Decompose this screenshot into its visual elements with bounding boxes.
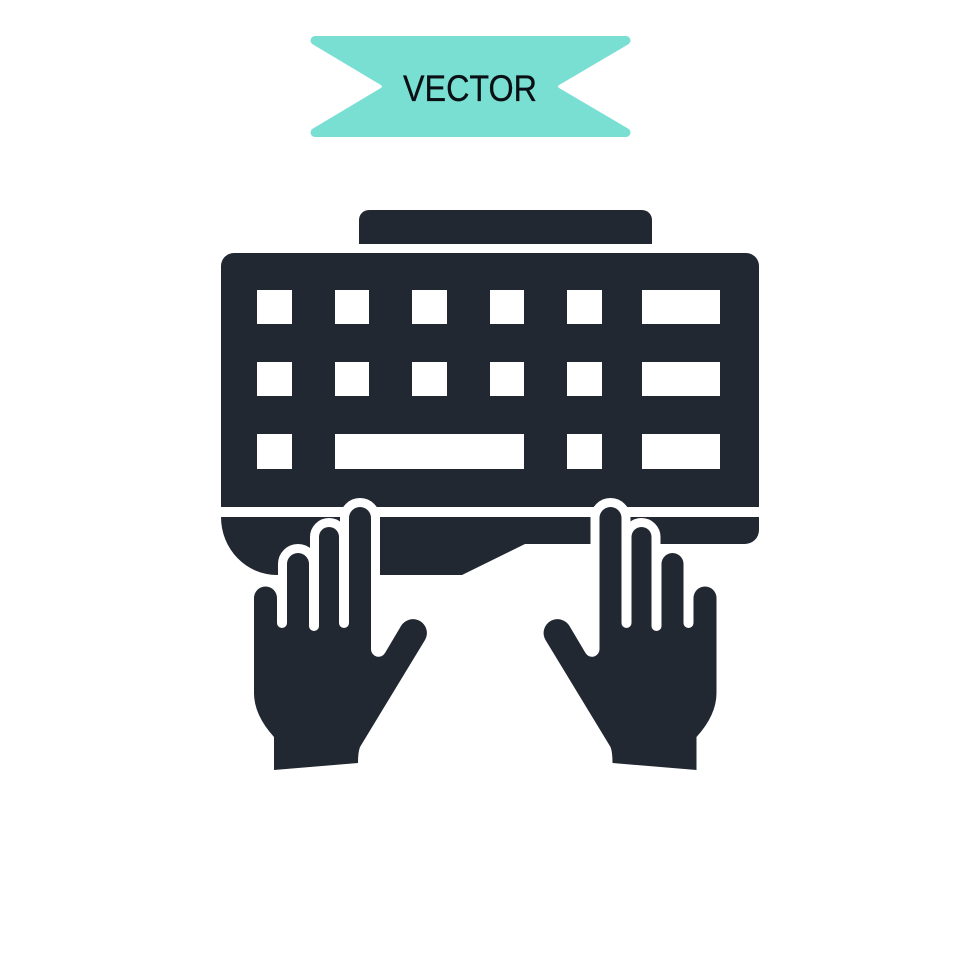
banner label: VECTOR: VECTOR — [403, 68, 537, 109]
keyboard body with keys — [221, 253, 759, 507]
keyboard top strip — [359, 210, 652, 244]
ribbon banner — [311, 36, 630, 137]
icon: keyboard with hands — [221, 210, 759, 770]
right hand — [544, 507, 716, 770]
left hand — [254, 507, 427, 770]
keyboard lower edge — [221, 517, 759, 575]
